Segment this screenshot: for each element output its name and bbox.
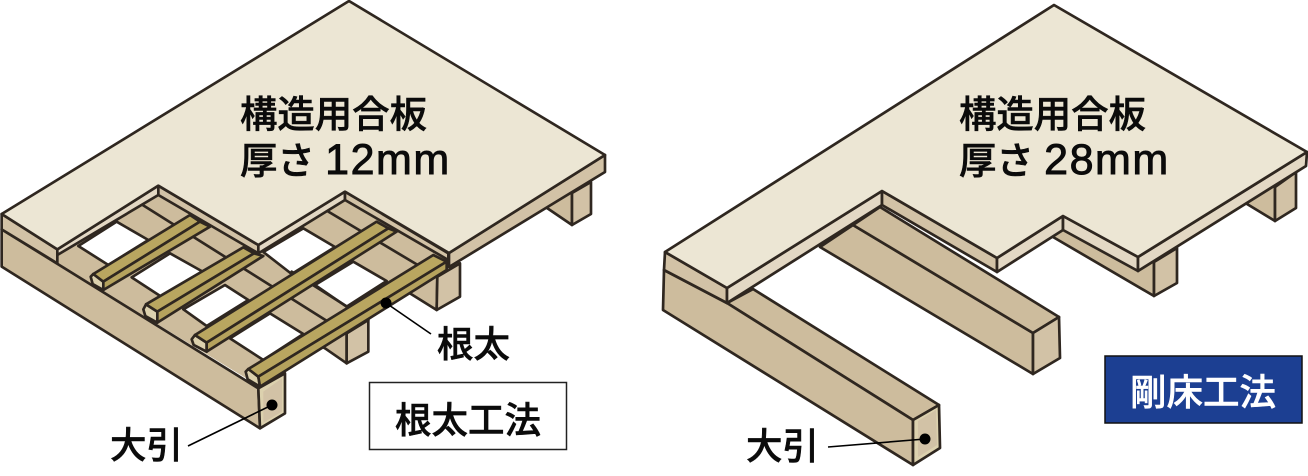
joist 4 xyxy=(246,255,447,387)
joist 2 xyxy=(143,247,263,323)
panel: rigid floor method diagram xyxy=(663,5,1307,465)
middle sleeper beam end xyxy=(1053,210,1177,296)
structural plywood 12mm xyxy=(2,1,605,267)
plywood label right xyxy=(959,94,1170,184)
floor beams and openings xyxy=(57,195,448,387)
label box: rigid floor method xyxy=(1105,356,1302,423)
plywood label right: 構造用合板 xyxy=(959,94,1146,136)
panel: joist method diagram xyxy=(2,1,605,428)
far sleeper beam end xyxy=(500,163,591,225)
front sill beam xyxy=(663,270,940,465)
plywood label left: 構造用合板 xyxy=(240,94,427,136)
beam lower edge xyxy=(292,272,368,320)
label box: joist method xyxy=(370,382,566,450)
back sill beam xyxy=(820,207,1060,374)
middle sleeper beam end xyxy=(383,263,460,310)
opening 4 xyxy=(230,313,303,360)
opening 2 xyxy=(132,253,203,297)
structural plywood 28mm xyxy=(664,5,1307,303)
callout: sill beam right xyxy=(746,426,930,467)
callout: joist xyxy=(380,298,510,365)
opening 5 xyxy=(263,228,335,274)
callout: sill beam left xyxy=(110,400,278,466)
label box: joist method: 根太工法 xyxy=(395,400,541,441)
plywood label right: 厚さ 28mm xyxy=(959,136,1170,184)
main sill beam xyxy=(2,229,285,428)
joist 1 xyxy=(91,215,210,290)
plywood label left: 厚さ 12mm xyxy=(240,136,451,184)
beam ridge line 2 xyxy=(328,212,437,277)
joist 3 xyxy=(192,222,397,352)
near sleeper beam end xyxy=(302,317,368,363)
opening 3 xyxy=(183,285,248,326)
beam ridge line 1 xyxy=(142,204,347,333)
far sleeper beam end xyxy=(1210,165,1296,221)
opening 6 xyxy=(315,262,387,307)
label box: rigid floor method: 剛床工法 xyxy=(1130,372,1276,413)
callout: sill beam left: 大引 xyxy=(110,425,183,466)
callout: joist: 根太 xyxy=(437,324,510,365)
plywood label left xyxy=(240,94,451,184)
callout: sill beam right: 大引 xyxy=(746,426,819,467)
opening 1 xyxy=(78,222,148,265)
